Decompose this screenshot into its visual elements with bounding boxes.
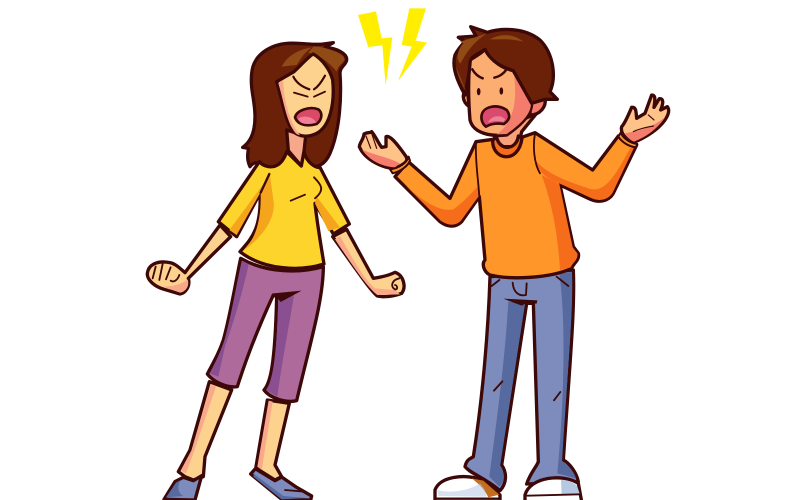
man left shoe	[435, 477, 500, 500]
man left hand	[359, 132, 407, 168]
man neck	[493, 113, 537, 147]
man ears	[463, 91, 545, 115]
woman yellow top	[218, 152, 349, 268]
woman right leg	[256, 400, 289, 480]
man left cuff	[390, 157, 410, 173]
man right cuff	[618, 133, 637, 147]
man: lower body	[435, 270, 582, 500]
man face	[469, 49, 532, 135]
woman capri pants	[207, 258, 323, 401]
woman neck	[287, 130, 306, 166]
woman left leg	[178, 382, 232, 480]
lightning bolts	[358, 8, 427, 85]
woman right shoe	[251, 469, 312, 500]
woman face	[277, 54, 333, 136]
man orange sweater	[395, 133, 637, 278]
woman: lower body	[164, 258, 323, 500]
man collar	[493, 136, 522, 157]
woman left arm and fist	[147, 225, 231, 294]
woman back hair	[243, 43, 347, 169]
woman: upper body	[147, 43, 404, 297]
man: upper body	[358, 8, 669, 278]
man mouth	[481, 106, 509, 127]
man jeans	[465, 270, 578, 491]
woman left shoe	[164, 476, 202, 500]
man hair	[454, 27, 557, 103]
man right hand	[621, 95, 669, 143]
woman right arm and fist	[333, 229, 404, 297]
man right shoe	[525, 478, 582, 500]
woman mouth	[295, 108, 321, 125]
